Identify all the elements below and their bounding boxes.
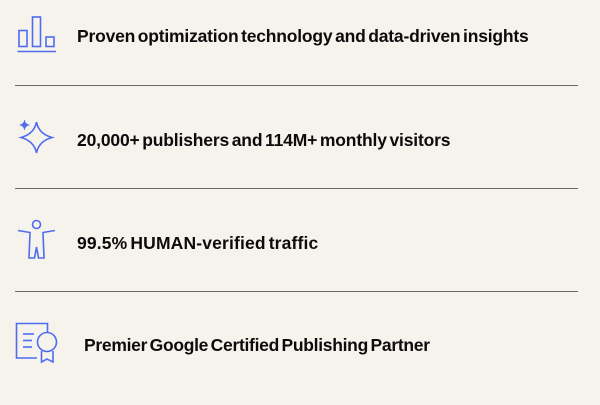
icon: human figure [18,220,56,259]
icon: certificate [16,322,58,364]
text: optimization technology: Proven optimization technology and data-driven insights [77,26,529,46]
text: publishers and visitors: 20,000+ publishers and 114M+ monthly visitors [77,130,450,150]
icon: sparkles [18,120,55,154]
icon: bar chart [18,16,56,52]
text: human-verified traffic: 99.5% HUMAN-verified traffic [77,233,318,253]
text: google partner: Premier Google Certified Publishing Partner [84,335,430,355]
